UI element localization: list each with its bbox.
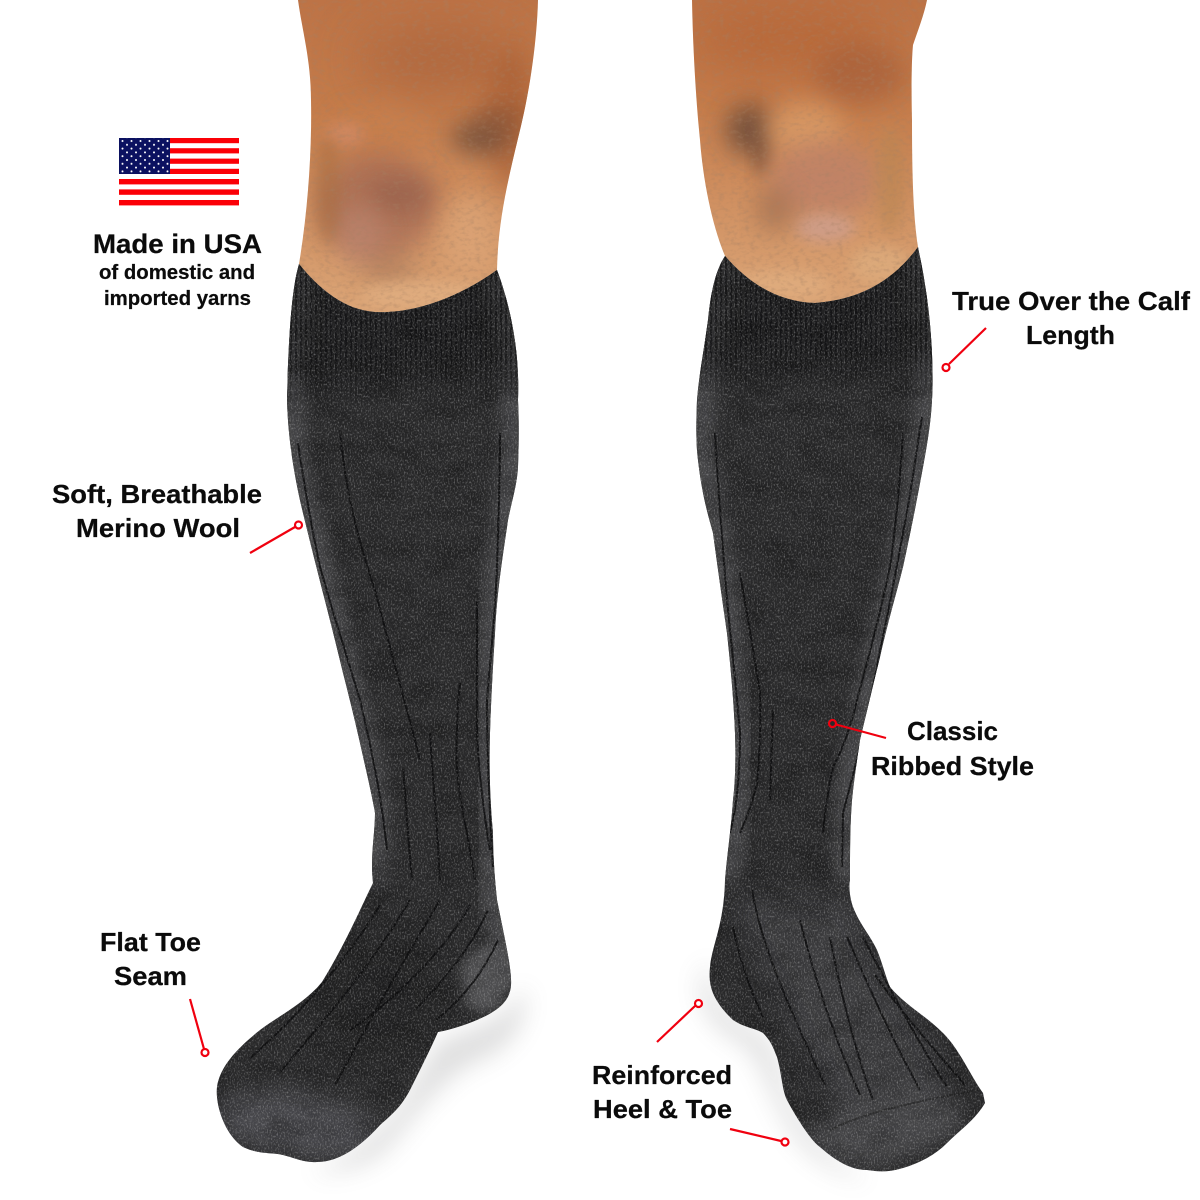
text: Made in USA: imported yarns [104, 288, 251, 310]
callout: Flat Toe Seam [100, 927, 208, 1056]
left sock ribs [250, 430, 500, 1085]
callout: Soft, Breathable Merino Wool [52, 479, 302, 553]
callout: Classic Ribbed Style: Ribbed Style [871, 751, 1034, 781]
callout: True Over the Calf Length: Length [1026, 320, 1115, 350]
left leg photo [206, 0, 545, 1170]
callout: Reinforced Heel and Toe [592, 1000, 788, 1146]
text: Made in USA [93, 229, 262, 310]
callout: Flat Toe Seam: Flat Toe [100, 927, 201, 957]
callout: Soft, Breathable Merino Wool: Soft, Breathable [52, 479, 262, 509]
text: Made in USA: of domestic and [99, 262, 255, 284]
left bare knee [290, 0, 545, 320]
right sock [690, 245, 990, 1180]
callout: Reinforced Heel and Toe: Reinforced [592, 1060, 732, 1090]
right leg photo [690, 0, 990, 1180]
right sock ribs [715, 417, 978, 1130]
floor shadows under the feet [310, 960, 870, 1182]
callout: True Over the Calf Length: True Over the Calf [952, 286, 1190, 316]
left sock [206, 255, 525, 1170]
callout: Reinforced Heel and Toe: Heel & Toe [593, 1094, 732, 1124]
callout: True Over the Calf Length [942, 286, 1190, 371]
callout: Soft, Breathable Merino Wool: Merino Wool [76, 513, 240, 543]
callout: Classic Ribbed Style [829, 716, 1034, 781]
text: Made in USA: Made in USA [93, 229, 262, 259]
callout: Flat Toe Seam: Seam [114, 961, 187, 991]
icon: American flag [119, 138, 239, 206]
callout: Classic Ribbed Style: Classic [907, 716, 998, 746]
right bare knee [690, 0, 930, 310]
